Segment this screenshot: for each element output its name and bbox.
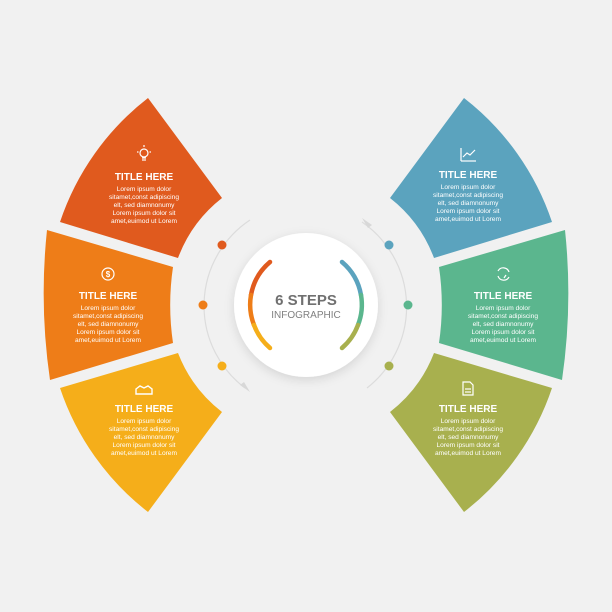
text: step 3 [109,404,179,457]
text: step 5 [468,291,538,344]
icon: dollar: $ [106,270,111,279]
center circle [234,233,378,377]
icon: document [463,382,473,395]
text: step 4: Lorem ipsum dolor sit [436,208,500,215]
text: step 1: Lorem ipsum dolor [117,186,172,193]
segment: bottom-left [60,353,222,512]
text: step 6: elt, sed diamnonumy [438,434,499,441]
icon: dollar [102,268,114,280]
text: step 6: amet,euimod ut Lorem [435,450,501,457]
center title: 6 STEPS [275,292,337,309]
center arcs [250,262,362,348]
text: step 4: Lorem ipsum dolor [441,184,496,191]
text: step 2: Lorem ipsum dolor sit [76,329,140,336]
icon: chart [461,148,476,161]
icon: handshake [136,386,152,394]
center title [271,292,341,321]
segment: top-left [60,98,222,258]
text: step 4: TITLE HERE [439,170,497,181]
text: step 5: amet,euimod ut Lorem [470,337,536,344]
segment: bottom-right [390,353,552,512]
text: step 2: sitamet,const adipiscing [73,313,143,320]
segment: mid-left [44,230,173,380]
text: step 6: Lorem ipsum dolor sit [436,442,500,449]
guide ring [204,220,407,388]
text: step 1: elt, sed diamnonumy [114,202,175,209]
text: step 2: amet,euimod ut Lorem [75,337,141,344]
dots [198,240,412,370]
text: step 4 [433,170,503,223]
text: step 6 [433,404,503,457]
text: step 6: TITLE HERE [439,404,497,415]
text: step 6: sitamet,const adipiscing [433,426,503,433]
text: step 5: Lorem ipsum dolor [476,305,531,312]
text: step 5: sitamet,const adipiscing [468,313,538,320]
text: step 1: amet,euimod ut Lorem [111,218,177,225]
text: step 3: sitamet,const adipiscing [109,426,179,433]
text: step 2: Lorem ipsum dolor [81,305,136,312]
text: step 3: amet,euimod ut Lorem [111,450,177,457]
segment: top-right [390,98,552,258]
icon: bulb [137,145,151,160]
arrows [240,218,372,392]
segment: mid-right [439,230,568,380]
icon: refresh [498,268,509,280]
text: step 4: amet,euimod ut Lorem [435,216,501,223]
text: step 1: Lorem ipsum dolor sit [112,210,176,217]
text: step 1: sitamet,const adipiscing [109,194,179,201]
text: step 5: TITLE HERE [474,291,532,302]
text: step 5: elt, sed diamnonumy [473,321,534,328]
text: step 2 [73,291,143,344]
text: step 5: Lorem ipsum dolor sit [471,329,535,336]
text: step 3: TITLE HERE [115,404,173,415]
text: step 4: sitamet,const adipiscing [433,192,503,199]
text: step 1 [109,172,179,225]
text: step 4: elt, sed diamnonumy [438,200,499,207]
text: step 6: Lorem ipsum dolor [441,418,496,425]
text: step 2: TITLE HERE [79,291,137,302]
center title: INFOGRAPHIC [271,310,341,321]
text: step 2: elt, sed diamnonumy [78,321,139,328]
text: step 3: Lorem ipsum dolor sit [112,442,176,449]
text: step 3: Lorem ipsum dolor [117,418,172,425]
text: step 1: TITLE HERE [115,172,173,183]
text: step 3: elt, sed diamnonumy [114,434,175,441]
